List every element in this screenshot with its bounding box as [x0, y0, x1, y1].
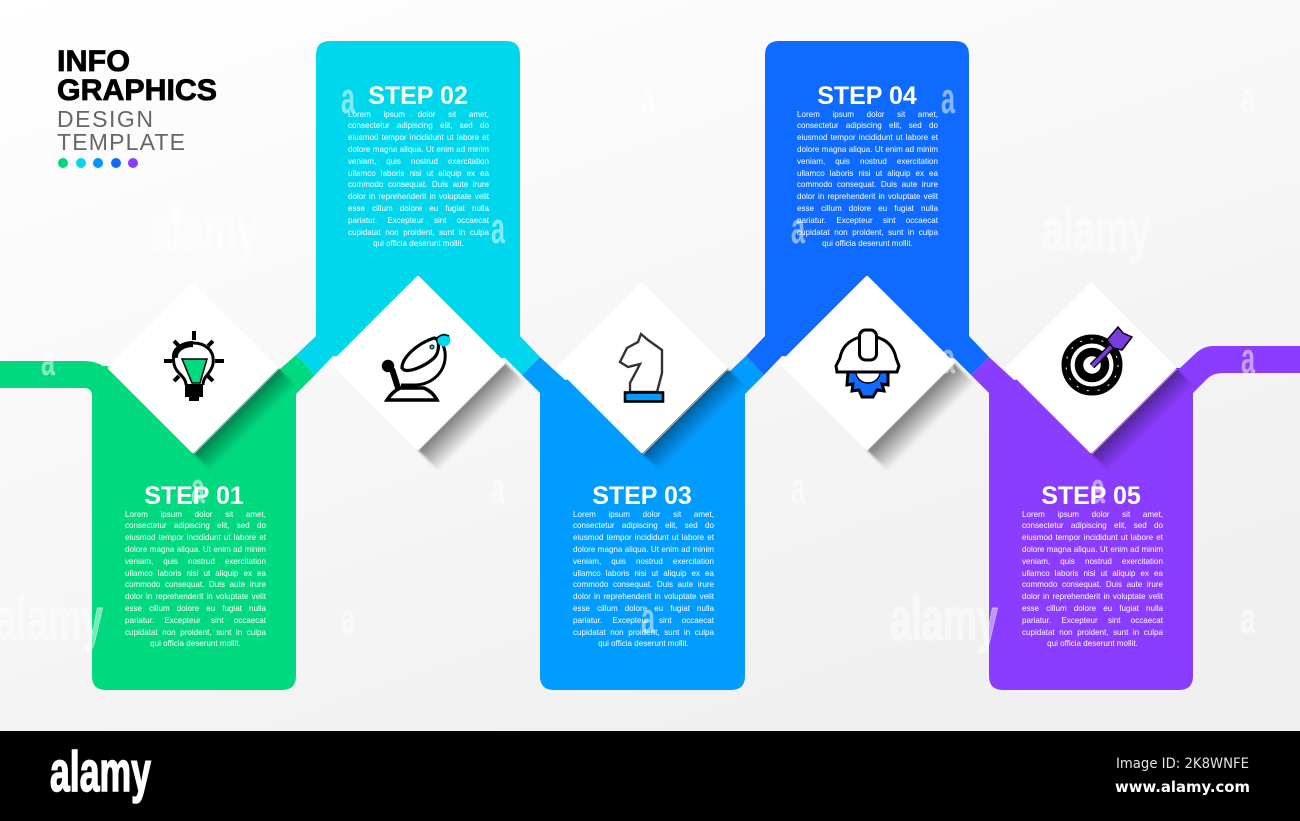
- panel: step 01: esse cillum dolore eu fugiat nulla: [125, 604, 266, 613]
- panel: step 01: ullamco laboris nisi ut aliquip ex ea: [125, 569, 266, 578]
- panel: step 02: qui officia deserunt mollit.: [373, 239, 464, 248]
- panel: step 05: qui officia deserunt mollit.: [1047, 639, 1138, 648]
- panel: step 05: esse cillum dolore eu fugiat nulla: [1022, 604, 1163, 613]
- panel: step 02: ullamco laboris nisi ut aliquip ex ea: [348, 169, 489, 178]
- watermark overlay: a: [941, 334, 955, 383]
- panel: step 04: consectetur adipiscing elit, sed do: [797, 121, 938, 130]
- watermark overlay: a: [641, 74, 655, 123]
- panel: step 02: eiusmod tempor incididunt ut labore et: [348, 133, 489, 142]
- panel: step 01: [0, 355, 315, 690]
- panel: step 05: veniam, quis nostrud exercitation: [1022, 557, 1163, 566]
- panel: step 04: [746, 41, 989, 375]
- panel: step 01: eiusmod tempor incididunt ut labore et: [125, 533, 266, 542]
- panel: step 04: eiusmod tempor incididunt ut labore et: [797, 133, 938, 142]
- panel: step 01: pariatur. Excepteur sint occaecat: [125, 616, 266, 625]
- title block: GRAPHICS: [57, 74, 217, 107]
- watermark overlay: a: [41, 336, 55, 385]
- watermark overlay: a: [341, 74, 355, 123]
- panel: step 05: [971, 346, 1300, 690]
- title block: [57, 45, 217, 168]
- watermark overlay: a: [791, 464, 805, 513]
- panel: step 01: consectetur adipiscing elit, sed do: [125, 521, 266, 530]
- panel: step 03: dolor in reprehenderit in voluptate velit: [573, 592, 714, 601]
- icon: chess knight: [620, 334, 663, 402]
- panel: step 05: ullamco laboris nisi ut aliquip ex ea: [1022, 569, 1163, 578]
- watermark overlay: a: [1241, 74, 1255, 123]
- panel: step 05: pariatur. Excepteur sint occaecat: [1022, 616, 1163, 625]
- card: step 04 diamond with hard hat and gear icon: [782, 278, 975, 471]
- panel: step 04: ullamco laboris nisi ut aliquip ex ea: [797, 169, 938, 178]
- watermark overlay: a: [491, 204, 505, 253]
- panel: step 03: esse cillum dolore eu fugiat nulla: [573, 604, 714, 613]
- panel: step 04: dolor in reprehenderit in voluptate velit: [797, 192, 938, 201]
- card: step 01 diamond with lightbulb icon: [110, 285, 296, 471]
- watermark overlay: a: [641, 594, 655, 643]
- panel: step 05: cupidatat non proident, sunt in culpa: [1022, 628, 1163, 637]
- title block: INFO: [57, 45, 130, 78]
- panel: step 04: dolore magna aliqua. Ut enim ad minim: [797, 145, 938, 154]
- panel: step 03: eiusmod tempor incididunt ut labore et: [573, 533, 714, 542]
- panel: step 03: qui officia deserunt mollit.: [598, 639, 689, 648]
- icon: hard hat with gear: [836, 330, 899, 397]
- watermark overlay: a: [1241, 594, 1255, 643]
- panel: step 02: pariatur. Excepteur sint occaecat: [348, 216, 489, 225]
- panel: step 03: veniam, quis nostrud exercitation: [573, 557, 714, 566]
- panel: step 01: dolore magna aliqua. Ut enim ad minim: [125, 545, 266, 554]
- panel: step 04: cupidatat non proident, sunt in culpa: [797, 228, 938, 237]
- panel: step 01: commodo consequat. Duis aute irure: [125, 580, 266, 589]
- panel: step 03: pariatur. Excepteur sint occaecat: [573, 616, 714, 625]
- watermark overlay: a: [941, 74, 955, 123]
- panel: step 01: veniam, quis nostrud exercitation: [125, 557, 266, 566]
- watermark overlay: a: [341, 594, 355, 643]
- panel: step 01: Lorem ipsum dolor sit amet,: [125, 510, 266, 519]
- panel: step 03: commodo consequat. Duis aute irure: [573, 580, 714, 589]
- panel: step 04: Lorem ipsum dolor sit amet,: [797, 110, 938, 119]
- panel: step 02: dolor in reprehenderit in voluptate velit: [348, 192, 489, 201]
- panel: step 02: veniam, quis nostrud exercitation: [348, 157, 489, 166]
- panel: step 03: ullamco laboris nisi ut aliquip ex ea: [573, 569, 714, 578]
- panel: step 03: [522, 356, 764, 690]
- icon: microscope: [384, 334, 450, 400]
- panel: step 01: qui officia deserunt mollit.: [150, 639, 241, 648]
- panel: step 03: STEP 03: [592, 482, 692, 510]
- panel: step 01: STEP 01: [144, 482, 244, 510]
- panel: step 04: veniam, quis nostrud exercitation: [797, 157, 938, 166]
- card: step 02 diamond with microscope icon: [333, 278, 526, 471]
- panel: step 04: commodo consequat. Duis aute irure: [797, 180, 938, 189]
- panel: step 05: consectetur adipiscing elit, sed do: [1022, 521, 1163, 530]
- panel: step 04: pariatur. Excepteur sint occaecat: [797, 216, 938, 225]
- panel: step 04: STEP 04: [817, 82, 917, 110]
- footer image id: Image ID: 2K8WNFE: [1116, 756, 1249, 772]
- panel: step 02: [296, 41, 540, 375]
- panel: step 02: esse cillum dolore eu fugiat nulla: [348, 204, 489, 213]
- panel: step 05: Lorem ipsum dolor sit amet,: [1022, 510, 1163, 519]
- panel: step 05: commodo consequat. Duis aute irure: [1022, 580, 1163, 589]
- watermark overlay: a: [491, 464, 505, 513]
- panel: step 03: consectetur adipiscing elit, sed do: [573, 521, 714, 530]
- panel: step 05: STEP 05: [1041, 482, 1141, 510]
- panel: step 04: qui officia deserunt mollit.: [822, 239, 913, 248]
- watermark overlay: alamy: [0, 586, 103, 653]
- footer bar: [0, 731, 1300, 821]
- watermark overlay: a: [791, 204, 805, 253]
- footer logo: alamy: [50, 740, 151, 804]
- watermark overlay: alamy: [1042, 196, 1150, 263]
- panel: step 05: dolore magna aliqua. Ut enim ad minim: [1022, 545, 1163, 554]
- panel: step 03: cupidatat non proident, sunt in culpa: [573, 628, 714, 637]
- watermark overlay: alamy: [150, 196, 258, 263]
- panel: step 01: cupidatat non proident, sunt in culpa: [125, 628, 266, 637]
- watermark overlay: [0, 74, 1255, 653]
- panel: step 03: Lorem ipsum dolor sit amet,: [573, 510, 714, 519]
- panel: step 02: Lorem ipsum dolor sit amet,: [348, 110, 489, 119]
- panel: step 03: dolore magna aliqua. Ut enim ad minim: [573, 545, 714, 554]
- watermark overlay: a: [191, 464, 205, 513]
- card: step 05 diamond with target icon: [1008, 285, 1194, 471]
- watermark overlay: alamy: [890, 586, 998, 653]
- panel: step 04: esse cillum dolore eu fugiat nulla: [797, 204, 938, 213]
- footer url: www.alamy.com: [1115, 778, 1250, 796]
- panel: step 02: dolore magna aliqua. Ut enim ad minim: [348, 145, 489, 154]
- title block: DESIGN: [57, 106, 153, 132]
- panel: step 02: consectetur adipiscing elit, sed do: [348, 121, 489, 130]
- panel: step 02: STEP 02: [368, 82, 468, 110]
- watermark overlay: a: [1091, 464, 1105, 513]
- icon: lightbulb: [164, 331, 224, 401]
- panel: step 02: commodo consequat. Duis aute irure: [348, 180, 489, 189]
- card: step 03 diamond with chess knight icon: [559, 285, 745, 471]
- icon: target with arrow: [1066, 327, 1132, 391]
- panel: step 02: cupidatat non proident, sunt in culpa: [348, 228, 489, 237]
- title block: TEMPLATE: [57, 129, 185, 155]
- watermark overlay: a: [1241, 334, 1255, 383]
- panel: step 05: eiusmod tempor incididunt ut labore et: [1022, 533, 1163, 542]
- panel: step 05: dolor in reprehenderit in voluptate velit: [1022, 592, 1163, 601]
- panel: step 01: dolor in reprehenderit in voluptate velit: [125, 592, 266, 601]
